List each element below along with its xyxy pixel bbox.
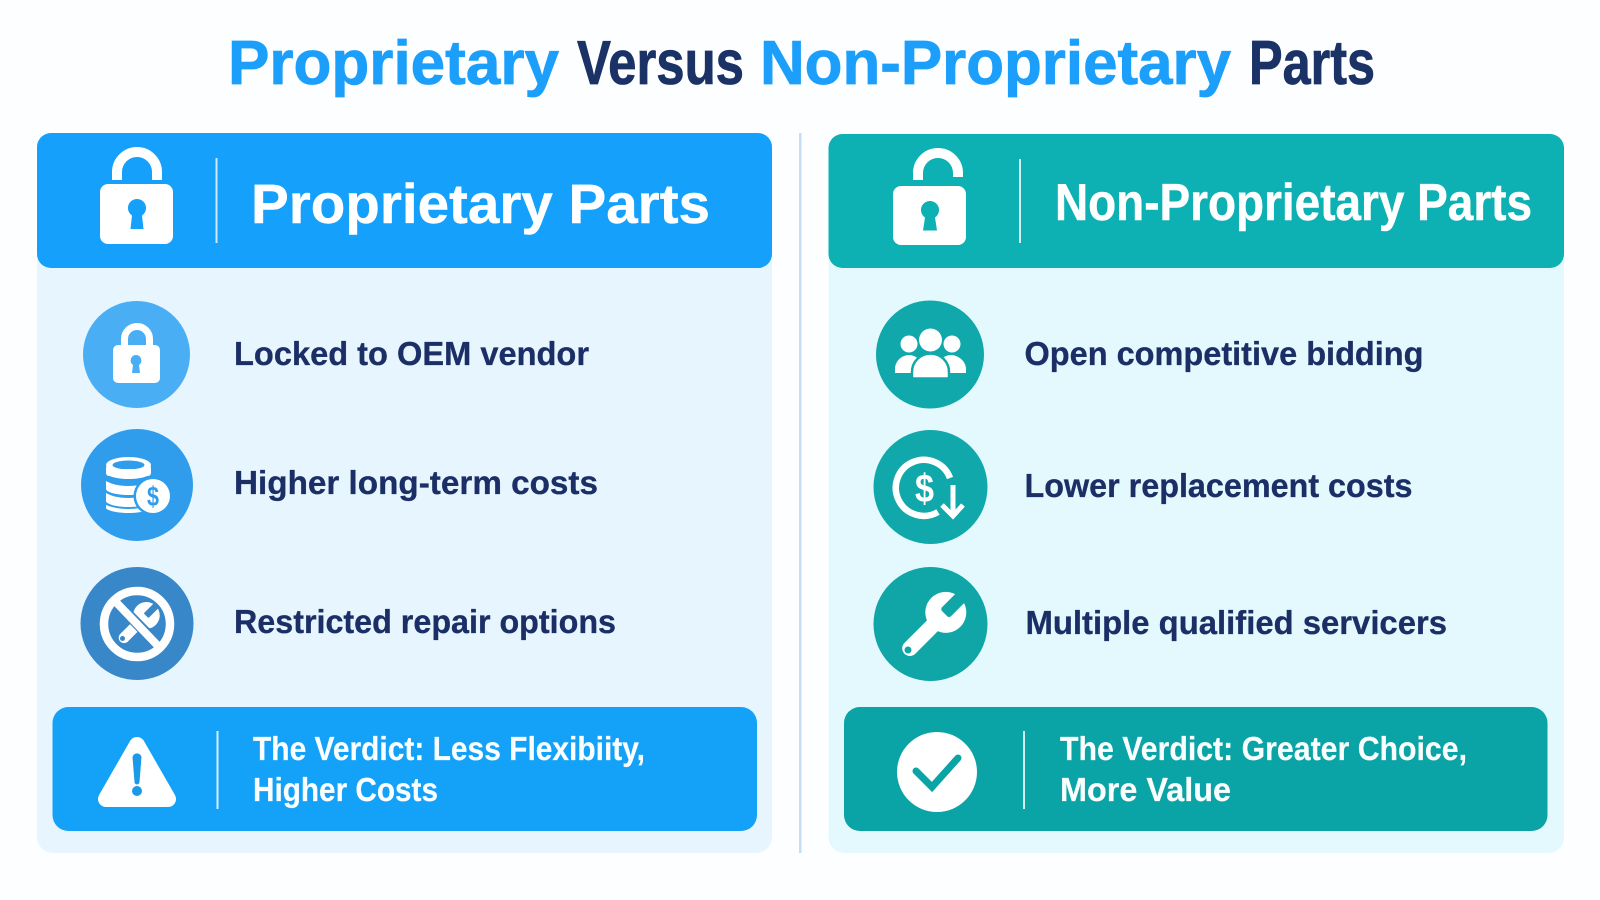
panel: non-proprietary parts [828,134,1564,853]
item: multiple qualified servicers [874,567,1447,681]
verdict text: Higher Costs [253,771,438,808]
callout: verdict [844,707,1548,831]
callout: verdict [52,707,757,831]
item: higher long-term costs: Higher long-term costs [234,464,598,501]
icon: open padlock [893,153,966,245]
header text: Proprietary Parts [251,172,710,235]
header text: Non-Proprietary Parts [1055,174,1532,232]
item: locked to OEM vendor: Locked to OEM vendor [234,335,589,372]
icon: wrench [874,567,988,681]
verdict text: The Verdict: Greater Choice, [1060,730,1467,767]
item: locked to OEM vendor [83,301,589,408]
verdict text [1060,730,1467,808]
icon: prohibited wrench [80,567,194,680]
icon: people group [876,300,984,408]
icon: coins with dollar [81,429,193,541]
icon: coins with dollar: $ [147,481,159,512]
icon: closed padlock [100,152,173,244]
item: restricted repair options [80,567,616,680]
verdict text: More Value [1060,771,1231,808]
verdict text: The Verdict: Less Flexibiity, [253,730,645,767]
verdict text [253,730,645,808]
title [228,29,1375,98]
item: lower replacement costs [874,430,1412,544]
icon: warning triangle [106,745,168,799]
center divider [799,133,802,853]
title: Proprietary [228,29,560,98]
item: restricted repair options: Restricted repair options [234,603,616,640]
icon: padlock in circle [83,301,190,408]
item: lower replacement costs: Lower replacement costs [1024,467,1412,504]
item: open competitive bidding: Open competitive bidding [1024,335,1424,372]
item: open competitive bidding [876,300,1424,408]
panel: proprietary parts [37,133,772,853]
title: Versus [577,29,744,98]
header: non-proprietary parts [828,134,1564,268]
icon: check mark [897,732,977,812]
title: Non-Proprietary [760,29,1232,98]
header: proprietary parts [37,133,772,268]
icon: dollar with down arrow [874,430,988,544]
item: multiple qualified servicers: Multiple qualified servicers [1026,604,1447,641]
icon: dollar with down arrow: $ [915,467,934,511]
item: higher long-term costs [81,429,598,541]
title: Parts [1249,29,1375,98]
